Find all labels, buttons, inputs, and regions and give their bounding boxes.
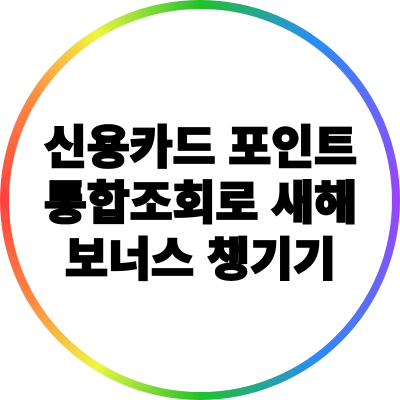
title line 3: 보너스 챙기기 — [65, 234, 336, 286]
title line 2: 통합조회로 새해 — [44, 177, 357, 229]
title line 1: 신용카드 포인트 — [44, 122, 357, 174]
